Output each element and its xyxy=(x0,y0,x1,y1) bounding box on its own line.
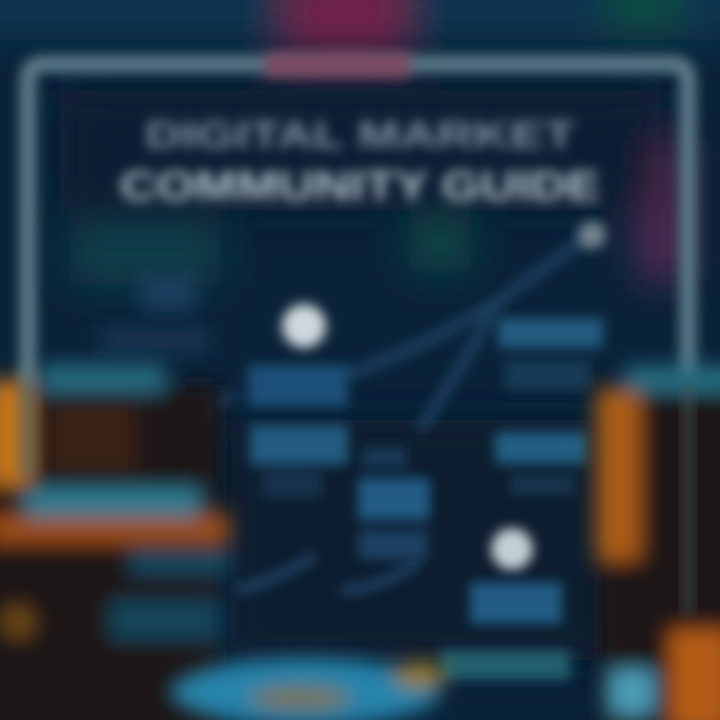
title line 1: DIGITAL MARKET xyxy=(145,115,575,157)
frame xyxy=(28,64,688,640)
panel: lower centre column xyxy=(358,448,430,560)
globe base xyxy=(170,658,446,720)
right shelf scene xyxy=(596,366,720,720)
panel: centre column xyxy=(248,365,348,498)
icon: lower node xyxy=(491,528,533,570)
flow lines xyxy=(150,235,590,590)
title xyxy=(120,115,600,209)
frame right lower overlay xyxy=(682,385,694,615)
frame left lower overlay xyxy=(18,365,38,475)
arrow tip xyxy=(578,221,606,249)
panel: lower right xyxy=(440,582,570,680)
frame crimson highlight xyxy=(265,52,410,78)
panel: right column xyxy=(495,318,603,495)
left top small icon xyxy=(140,275,195,310)
icon: upper node xyxy=(282,304,326,348)
title line 2: COMMUNITY GUIDE xyxy=(120,162,600,209)
left shelf scene xyxy=(0,364,230,720)
